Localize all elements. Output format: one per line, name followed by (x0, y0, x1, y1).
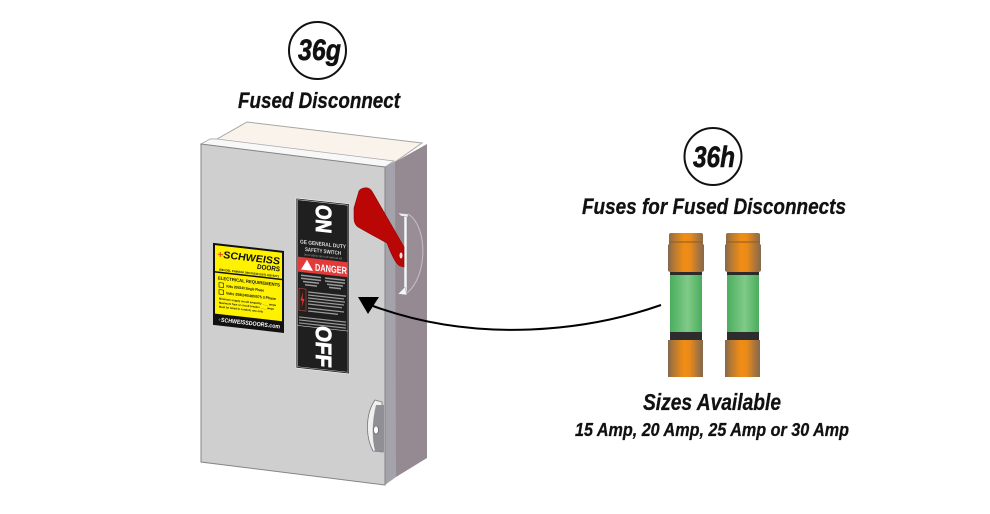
badge: 36g (289, 22, 346, 79)
black on/off switch plate (296, 198, 350, 374)
badge: 36h (684, 128, 742, 185)
yellow electrical label: Must be wired in conduit, one only (219, 305, 263, 314)
arrow from fuses to disconnect (358, 297, 661, 330)
heading: Fused Disconnect: Fused Disconnect (238, 88, 401, 113)
side hinge bracket (398, 213, 423, 295)
yellow electrical label (213, 243, 284, 333)
red disconnect handle (354, 188, 404, 267)
yellow electrical label: Volts 208/240/480/575 3 Phase (226, 291, 276, 301)
black on/off switch plate: 30 A FUSED 240 V AC MAX 60 HZ (304, 253, 342, 261)
fuse 1 (668, 233, 704, 377)
yellow electrical label: +SCHWEISSDOORS.com (218, 317, 281, 331)
yellow electrical label: DOORS (257, 264, 280, 274)
yellow electrical label: WIN DEL PHINTAK MN 05030 (507) 426-8273 (219, 268, 279, 278)
door latch (367, 400, 384, 452)
badge: 36h: 36h (693, 141, 735, 174)
yellow electrical label: +SCHWEISS (217, 249, 280, 268)
enclosure right side (395, 144, 427, 477)
text: fuse sizes: 15 Amp, 20 Amp, 25 Amp or 30 Amp (575, 420, 849, 440)
fused disconnect enclosure (201, 122, 427, 485)
yellow electrical label: Maximum fuse or circuit breaker ____ amps (219, 301, 274, 311)
enclosure top (210, 122, 422, 167)
yellow electrical label: Minimum supply circuit ampacity ____ amps (219, 297, 276, 307)
yellow electrical label: ELECTRICAL REQUIREMENTS (218, 275, 280, 288)
black on/off switch plate: DANGER (315, 263, 348, 277)
yellow electrical label: Volts 208/240 Single Phase (226, 284, 264, 293)
black on/off switch plate: SAFETY SWITCH (305, 247, 341, 257)
heading: Fuses for Fused Disconnects: Fuses for Fused Disconnects (582, 194, 846, 219)
black on/off switch plate: OFF (311, 325, 336, 368)
fuse 2 (725, 233, 761, 377)
enclosure front door (201, 144, 385, 485)
text: Sizes Available: Sizes Available (643, 389, 781, 415)
black on/off switch plate: ON (311, 204, 336, 234)
black on/off switch plate: GE GENERAL DUTY (300, 239, 346, 251)
badge: 36g: 36g (298, 34, 341, 67)
